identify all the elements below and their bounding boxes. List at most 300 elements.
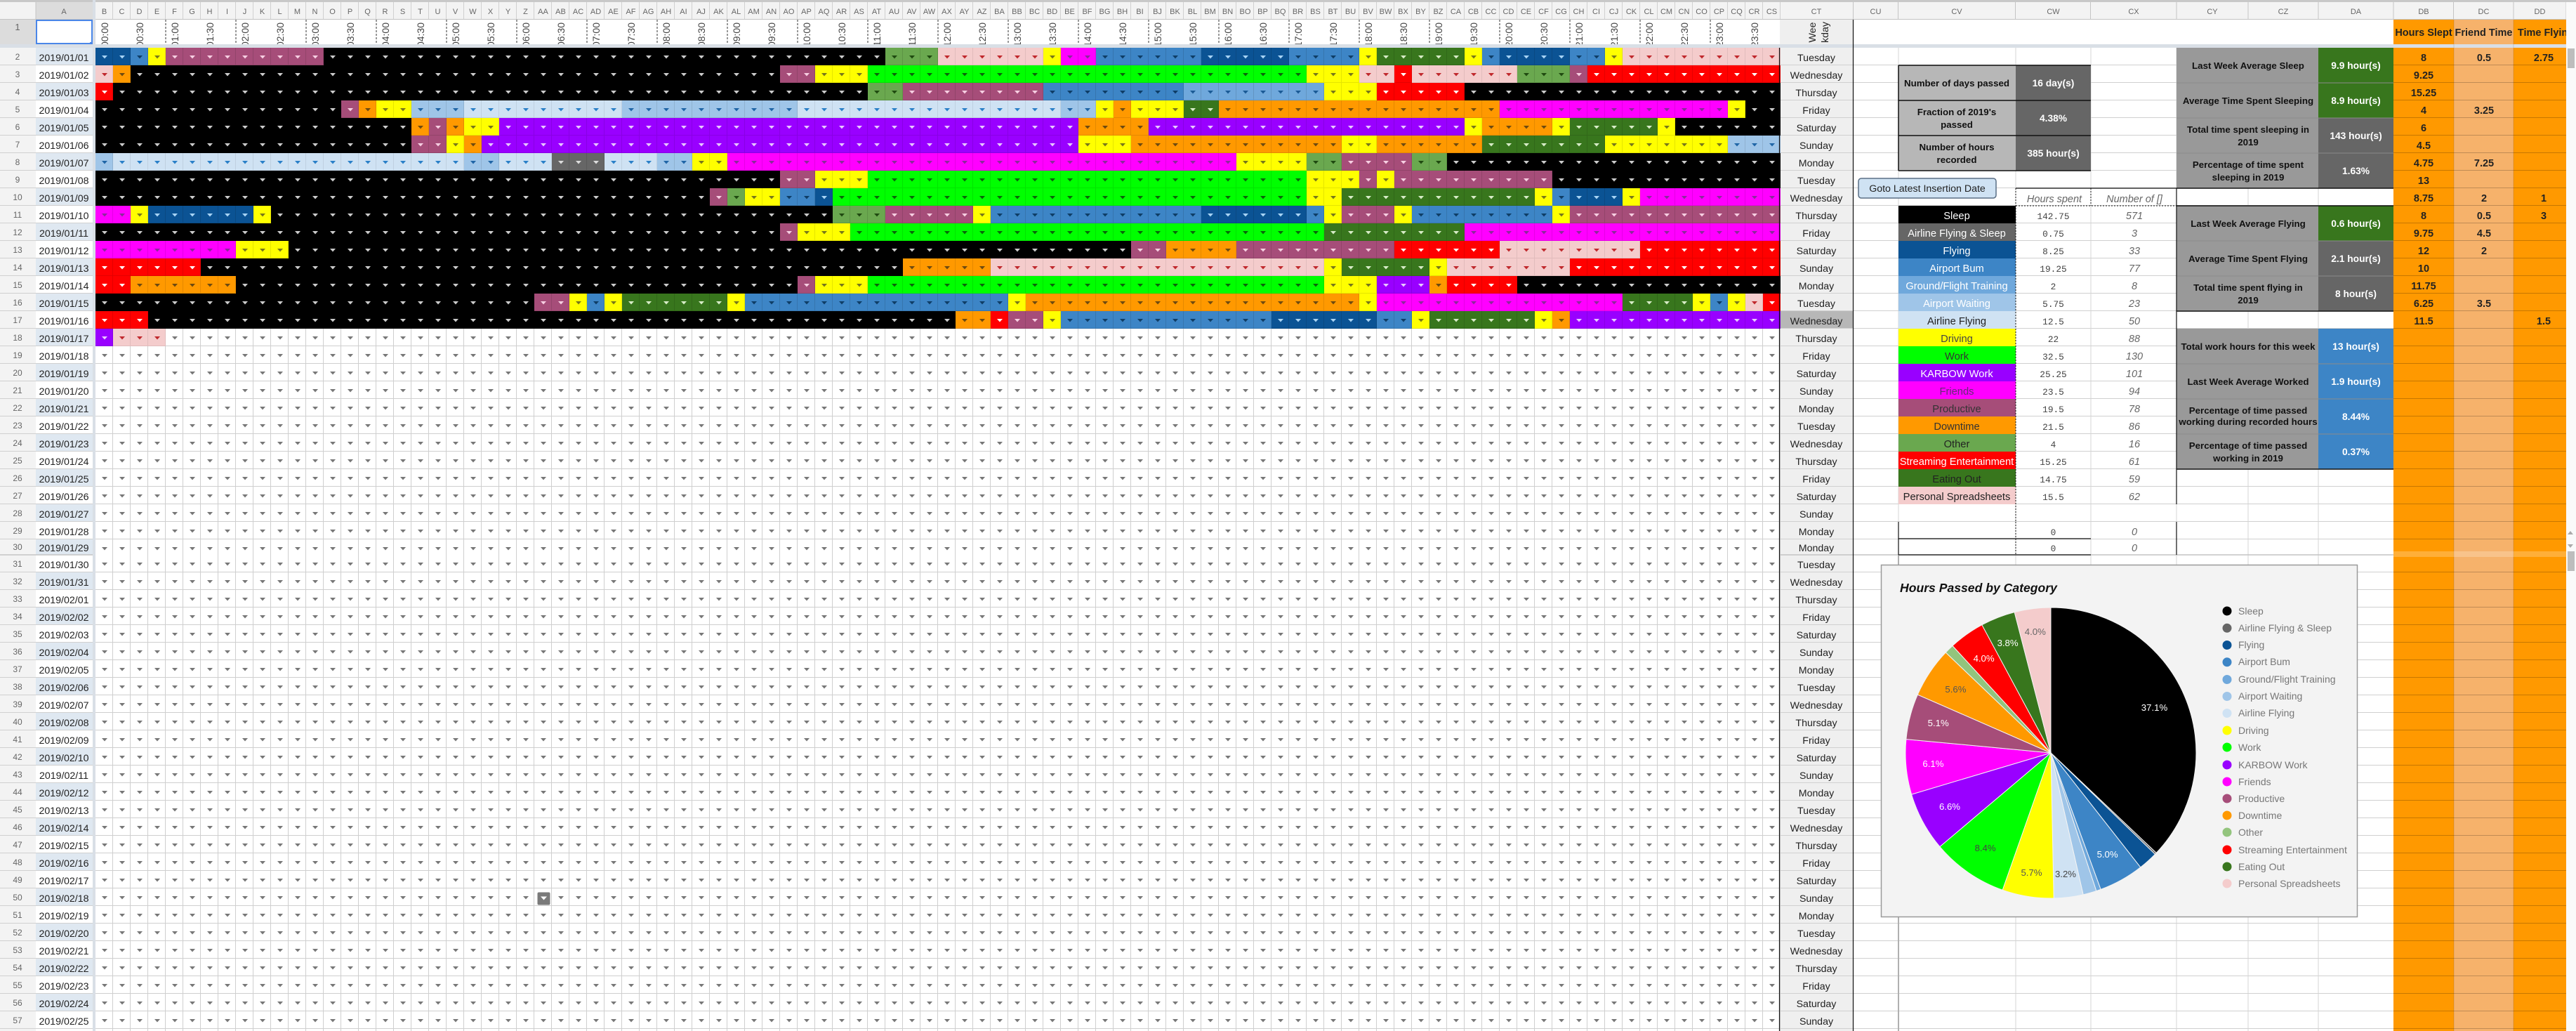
pie legend: Flying [2238, 639, 2264, 650]
weekday column: Tuesday [1797, 176, 1836, 187]
row numbers: 27 [13, 491, 22, 501]
chart title: Hours Passed by Category [1900, 581, 2058, 595]
date column: 2019/02/03 [39, 630, 89, 641]
column letter headers: BK [1170, 8, 1180, 16]
half-hour time header labels: 21:00 [1573, 22, 1585, 47]
hours slept values: 6 [2421, 123, 2426, 134]
number of cells column: 94 [2129, 386, 2140, 398]
row 2019/01/16 [95, 311, 1781, 329]
column letter headers: CP [1714, 8, 1724, 16]
pie percentage labels: 5.1% [1928, 718, 1949, 728]
date column: 2019/02/07 [39, 700, 89, 711]
column letter headers: BU [1345, 8, 1356, 16]
pie legend: Eating Out [2238, 861, 2285, 872]
column letter headers: DC [2478, 8, 2489, 16]
row 2019/01/10 [95, 206, 1781, 223]
weekday column: Monday [1799, 788, 1835, 799]
hours spent column: 5.75 [2042, 299, 2064, 310]
column letter headers: E [154, 8, 159, 16]
pie percentage labels: 5.6% [1945, 684, 1967, 695]
row 2019/01/11 [95, 223, 1781, 241]
time flying values: 1 [2541, 193, 2547, 204]
column letter headers: S [400, 8, 405, 16]
flying stat labels: Last Week Average Flying [2191, 218, 2306, 229]
sleep stat labels: sleeping in 2019 [2212, 172, 2284, 183]
number of cells column: 101 [2126, 369, 2143, 380]
weekday column: Friday [1802, 105, 1831, 117]
category labels: Streaming Entertainment [1900, 457, 2014, 468]
row numbers: 21 [13, 386, 22, 395]
row numbers: 26 [13, 473, 22, 483]
button: goto latest insertion date: Goto Latest Insertion Date [1869, 183, 1986, 195]
flying stat values: 0.6 hour(s) [2331, 218, 2381, 229]
weekday column: Wednesday [1790, 577, 1843, 589]
stat labels: Fraction of 2019's [1917, 107, 1996, 117]
date column [39, 53, 89, 1027]
date column: 2019/02/14 [39, 823, 89, 834]
category labels: Eating Out [1932, 474, 1981, 485]
category labels: Airline Flying & Sleep [1908, 228, 2006, 239]
column letter headers: AT [872, 8, 881, 16]
column letter headers: CY [2207, 8, 2218, 16]
date column: 2019/01/29 [39, 543, 89, 554]
row numbers: 17 [13, 315, 22, 325]
sleep stat values: 143 hour(s) [2330, 131, 2382, 141]
column letter headers: AN [766, 8, 777, 16]
weekday column: Sunday [1799, 263, 1834, 275]
category labels: Downtime [1934, 421, 1980, 433]
column letter headers: K [260, 8, 265, 16]
weekday column: Tuesday [1797, 560, 1836, 571]
row numbers: 5 [15, 105, 20, 114]
work stat values: 8.44% [2342, 412, 2370, 422]
category labels: Friends [1940, 386, 1974, 398]
friend time values [2474, 53, 2494, 310]
stat values [2027, 78, 2080, 159]
row 2019/01/07 [95, 153, 1781, 171]
column letter headers: AJ [696, 8, 706, 16]
column letter headers: AB [555, 8, 566, 16]
weekday column: Saturday [1797, 369, 1837, 380]
empty rows upper block [95, 346, 1781, 539]
half-hour time header labels: 05:30 [485, 22, 496, 47]
hours spent column: 8.25 [2042, 247, 2064, 257]
weekday column: Friday [1802, 228, 1831, 239]
row numbers: 22 [13, 403, 22, 413]
half-hour time header labels: 12:30 [977, 22, 988, 47]
row numbers: 57 [13, 1016, 22, 1025]
work stat values [2331, 341, 2381, 457]
row numbers: 46 [13, 822, 22, 832]
row 2019/01/14 [95, 276, 1781, 294]
row numbers: 1 [15, 22, 20, 32]
column letter headers: F [172, 8, 177, 16]
pie legend: Productive [2238, 793, 2285, 804]
row numbers: 24 [13, 438, 22, 448]
half-hour time header labels: 22:30 [1679, 22, 1690, 47]
hours slept values: 12 [2418, 246, 2429, 257]
weekday column: Monday [1799, 665, 1835, 676]
weekday column: Wednesday [1790, 193, 1843, 204]
pie percentage labels: 3.8% [1997, 638, 2019, 648]
date column: 2019/02/02 [39, 612, 89, 624]
row numbers: 20 [13, 368, 22, 378]
pie percentage labels: 37.1% [2141, 702, 2167, 713]
date column: 2019/01/23 [39, 439, 89, 450]
half-hour time header labels: 00:30 [134, 22, 145, 47]
weekday column: Thursday [1795, 211, 1837, 222]
hours slept values: 9.75 [2414, 228, 2433, 239]
half-hour time header labels: 18:00 [1363, 22, 1374, 47]
selected cell A1 [37, 20, 94, 46]
row numbers: 18 [13, 333, 22, 343]
pie percentage labels: 4.0% [1974, 653, 1995, 664]
work stat labels: Percentage of time passed [2189, 405, 2307, 416]
work stat labels: working during recorded hours [2178, 416, 2318, 427]
weekday column: Wednesday [1790, 70, 1843, 81]
hours spent column: 19.5 [2042, 405, 2064, 415]
column letter headers [61, 8, 2545, 16]
pie legend: Friends [2238, 776, 2271, 787]
column letter headers: AS [854, 8, 864, 16]
category labels: Ground/Flight Training [1905, 281, 2008, 292]
weekday column: Thursday [1795, 334, 1837, 345]
column letter headers: A [61, 8, 67, 16]
work stat values: 1.9 hour(s) [2331, 376, 2381, 387]
hours spent column: 32.5 [2042, 352, 2064, 362]
row 2019/01/02 [95, 65, 1781, 83]
row numbers: 4 [15, 87, 20, 97]
column letter headers: BM [1204, 8, 1216, 16]
column letter headers: D [137, 8, 143, 16]
column letter headers: CT [1811, 8, 1822, 16]
row numbers: 48 [13, 858, 22, 867]
half-hour time header labels: 04:00 [380, 22, 391, 47]
row numbers: 55 [13, 980, 22, 990]
row numbers: 56 [13, 998, 22, 1008]
weekday column: Wednesday [1790, 700, 1843, 711]
half-hour time header labels: 13:30 [1047, 22, 1058, 47]
column letter headers: BD [1047, 8, 1057, 16]
date column: 2019/02/22 [39, 964, 89, 975]
scrollbar [2566, 2, 2576, 1031]
column letter headers: L [277, 8, 282, 16]
column letter headers: AG [643, 8, 654, 16]
date column: 2019/01/19 [39, 369, 89, 380]
half-hour time header labels: 06:30 [555, 22, 567, 47]
row 2019/01/13 [95, 258, 1781, 276]
number of cells column: 0 [2132, 527, 2137, 538]
row numbers: 23 [13, 421, 22, 431]
weekday column: Monday [1799, 404, 1835, 415]
date column: 2019/01/14 [39, 281, 89, 292]
weekday column: Thursday [1795, 841, 1837, 852]
pie legend: Other [2238, 827, 2263, 838]
column letter headers: I [226, 8, 228, 16]
row numbers: 50 [13, 893, 22, 902]
row numbers: 9 [15, 175, 20, 185]
half-hour time header labels: 18:30 [1398, 22, 1409, 47]
weekday column background [1780, 20, 1853, 1031]
column letter headers: Q [364, 8, 371, 16]
pie legend: Work [2238, 742, 2261, 753]
panel: work stats [2177, 329, 2393, 469]
hours slept values: 9.25 [2414, 70, 2433, 81]
hours slept values: 13 [2418, 176, 2429, 187]
column letter headers: CC [1486, 8, 1496, 16]
row numbers: 41 [13, 735, 22, 744]
half-hour time header labels: 02:00 [239, 22, 251, 47]
weekday column: Monday [1799, 527, 1835, 538]
stat labels: Number of hours [1919, 142, 1995, 152]
time tracking grid [95, 48, 1781, 1031]
hours slept values: 8 [2421, 211, 2426, 222]
date column: 2019/01/11 [39, 228, 88, 239]
weekday column: Thursday [1795, 718, 1837, 729]
column letter headers: CE [1521, 8, 1531, 16]
hours slept values: 8 [2421, 53, 2426, 64]
row numbers: 37 [13, 664, 22, 674]
date column: 2019/02/18 [39, 893, 89, 905]
column letter headers: BP [1257, 8, 1268, 16]
half-hour time header labels: 10:30 [836, 22, 847, 47]
date column alternating fill [36, 48, 93, 1011]
column letter headers: T [418, 8, 423, 16]
column letter headers: AF [626, 8, 636, 16]
column letter headers: X [488, 8, 494, 16]
date column: 2019/01/25 [39, 474, 89, 485]
stat values: 385 hour(s) [2027, 148, 2080, 159]
sleep stat labels: Percentage of time spent [2193, 159, 2304, 170]
column letter headers: AU [889, 8, 899, 16]
column letter headers: CL [1644, 8, 1654, 16]
half-hour time header labels: 22:00 [1644, 22, 1655, 47]
column letter headers: CZ [2278, 8, 2289, 16]
weekday column: Sunday [1799, 893, 1834, 905]
hours spent column: 14.75 [2040, 475, 2067, 485]
column letter headers: AQ [819, 8, 830, 16]
panel: days passed stats [1898, 65, 2091, 171]
column letter headers: BV [1363, 8, 1373, 16]
half-hour time header labels: 02:30 [275, 22, 286, 47]
column letter headers: AO [784, 8, 795, 16]
half-hour time header labels: 15:00 [1152, 22, 1163, 47]
pie legend: Personal Spreadsheets [2238, 878, 2341, 889]
category labels: Other [1944, 439, 1969, 450]
column letter headers: W [469, 8, 477, 16]
row numbers: 30 [13, 542, 22, 552]
weekday column: Sunday [1799, 770, 1834, 782]
number of cells column: 88 [2129, 334, 2140, 345]
date column: 2019/01/13 [39, 263, 89, 275]
column letter headers: M [294, 8, 300, 16]
number of cells column: 16 [2129, 439, 2141, 450]
hours spent column: 15.5 [2042, 492, 2064, 503]
weekday column: Monday [1799, 543, 1835, 554]
stat labels: recorded [1937, 155, 1976, 165]
stat labels: Number of days passed [1904, 78, 2009, 88]
panel: orange tracking columns [2393, 20, 2574, 1031]
number of cells column: 77 [2129, 263, 2141, 275]
weekday column: Thursday [1795, 595, 1837, 606]
half-hour time header labels: 06:00 [520, 22, 531, 47]
number of cells column: 0 [2132, 543, 2137, 554]
number of cells column [2126, 211, 2143, 554]
category labels: Productive [1932, 404, 1981, 415]
pie legend: Airline Flying & Sleep [2238, 622, 2332, 633]
time flying values [2534, 53, 2554, 327]
column letter headers: AV [907, 8, 917, 16]
column letter headers: AY [960, 8, 970, 16]
column letter headers: Y [506, 8, 511, 16]
row numbers: 39 [13, 700, 22, 709]
stat labels: passed [1941, 119, 1973, 130]
category labels: Flying [1943, 246, 1971, 257]
date column: 2019/02/10 [39, 753, 89, 764]
row numbers: 54 [13, 963, 22, 973]
panel: sleep stats [2177, 48, 2393, 188]
hours spent column [2037, 211, 2070, 554]
flying stat labels: Average Time Spent Flying [2188, 254, 2308, 264]
number of cells column: 571 [2126, 211, 2143, 222]
friend time values: 4.5 [2477, 228, 2491, 239]
flying stat values: 8 hour(s) [2335, 289, 2377, 299]
pie legend: Sleep [2238, 605, 2264, 617]
panel: pie chart [1882, 565, 2358, 917]
row numbers: 3 [15, 70, 20, 79]
hours spent column: 19.25 [2040, 264, 2067, 275]
row numbers: 7 [15, 140, 20, 150]
date column: 2019/01/16 [39, 316, 89, 327]
hours slept values [2411, 53, 2436, 327]
work stat labels: Percentage of time passed [2189, 440, 2307, 451]
date column: 2019/01/20 [39, 386, 89, 398]
column letter headers: V [453, 8, 458, 16]
hours slept values: 11.5 [2414, 316, 2433, 327]
weekday column: Friday [1802, 474, 1831, 485]
date column: 2019/02/05 [39, 665, 89, 676]
orange column headings: Hours Slept [2395, 27, 2452, 39]
hours spent column: 25.25 [2040, 369, 2067, 380]
weekday column: Tuesday [1797, 298, 1836, 310]
column letter headers: CX [2128, 8, 2139, 16]
weekday column: Saturday [1797, 246, 1837, 257]
date column: 2019/01/18 [39, 351, 89, 362]
column letter headers: BY [1415, 8, 1426, 16]
partly hidden row 30 [95, 539, 1781, 555]
row 2019/01/08 [95, 171, 1781, 188]
time flying values: 1.5 [2537, 316, 2551, 327]
date column: 2019/01/31 [39, 577, 89, 589]
weekday column: Sunday [1799, 648, 1834, 659]
category colour cells [1898, 206, 2016, 504]
column letter headers: CR [1749, 8, 1759, 16]
hours slept values: 11.75 [2411, 281, 2436, 292]
work stat labels [2178, 341, 2318, 464]
half-hour time header labels: 17:30 [1328, 22, 1339, 47]
weekday column: Thursday [1795, 964, 1837, 975]
date column: 2019/01/01 [39, 53, 89, 64]
column letter headers: BN [1222, 8, 1233, 16]
pie legend [2223, 605, 2347, 889]
weekday column: Sunday [1799, 386, 1834, 398]
category labels: Airline Flying [1927, 316, 1986, 327]
column letter headers: BX [1398, 8, 1408, 16]
row numbers [13, 22, 22, 1025]
date column: 2019/01/05 [39, 123, 89, 134]
pie legend: KARBOW Work [2238, 759, 2309, 770]
work stat labels: Last Week Average Worked [2188, 376, 2309, 387]
row 2019/01/09 [95, 188, 1781, 206]
date column: 2019/01/08 [39, 176, 89, 187]
date column: 2019/01/28 [39, 527, 89, 538]
sleep stat values: 9.9 hour(s) [2331, 60, 2381, 71]
row numbers: 45 [13, 805, 22, 815]
column letter headers: DD [2535, 8, 2545, 16]
work stat values: 0.37% [2342, 447, 2370, 457]
date column: 2019/02/19 [39, 911, 89, 922]
half-hour time header labels: 14:00 [1082, 22, 1093, 47]
column letter headers: CD [1503, 8, 1514, 16]
weekday column: Tuesday [1797, 806, 1836, 817]
pie legend: Airline Flying [2238, 707, 2294, 718]
date column: 2019/02/16 [39, 858, 89, 869]
row numbers: 42 [13, 752, 22, 762]
friend time values: 0.5 [2477, 211, 2491, 222]
column letter headers: AP [801, 8, 812, 16]
column letter headers: G [189, 8, 195, 16]
column letter headers: BT [1328, 8, 1338, 16]
column letter headers: H [207, 8, 213, 16]
row numbers: 29 [13, 526, 22, 536]
column letter headers: AL [732, 8, 741, 16]
date column: 2019/02/06 [39, 683, 89, 694]
row numbers: 44 [13, 787, 22, 797]
pie percentage labels [1922, 626, 2167, 879]
row numbers: 28 [13, 508, 22, 518]
category labels: Airport Waiting [1923, 298, 1990, 310]
hours slept values: 6.25 [2414, 298, 2433, 310]
flying stat labels [2188, 218, 2308, 306]
column letter headers: O [329, 8, 336, 16]
sleep stat values: 8.9 hour(s) [2331, 96, 2381, 106]
pie percentage labels: 6.6% [1939, 801, 1960, 812]
half-hour time header labels: 03:00 [310, 22, 321, 47]
column letter headers: CO [1696, 8, 1708, 16]
orange column headings: Friend Time [2455, 27, 2512, 39]
half-hour time header labels: 19:00 [1433, 22, 1444, 47]
hours spent column: 23.5 [2042, 387, 2064, 398]
pie percentage labels: 4.0% [2025, 626, 2046, 637]
half-hour time header labels: 07:30 [626, 22, 637, 47]
sleep stat labels [2183, 60, 2313, 183]
column letter headers: AD [590, 8, 601, 16]
column letter headers: BG [1099, 8, 1110, 16]
weekday column [1790, 21, 1843, 1027]
hours slept values: 4.5 [2417, 140, 2431, 152]
weekday column: Saturday [1797, 123, 1837, 134]
half-hour time header labels: 09:00 [731, 22, 742, 47]
number of cells column: 23 [2128, 298, 2140, 310]
column letter headers: BA [994, 8, 1005, 16]
row 2019/01/17 [95, 329, 1781, 346]
date column: 2019/01/21 [39, 404, 89, 415]
column letter headers: AI [680, 8, 687, 16]
date column: 2019/01/27 [39, 509, 89, 520]
friend time values: 3.25 [2474, 105, 2494, 117]
number of cells column: 78 [2129, 404, 2140, 415]
category labels: Work [1945, 351, 1969, 362]
